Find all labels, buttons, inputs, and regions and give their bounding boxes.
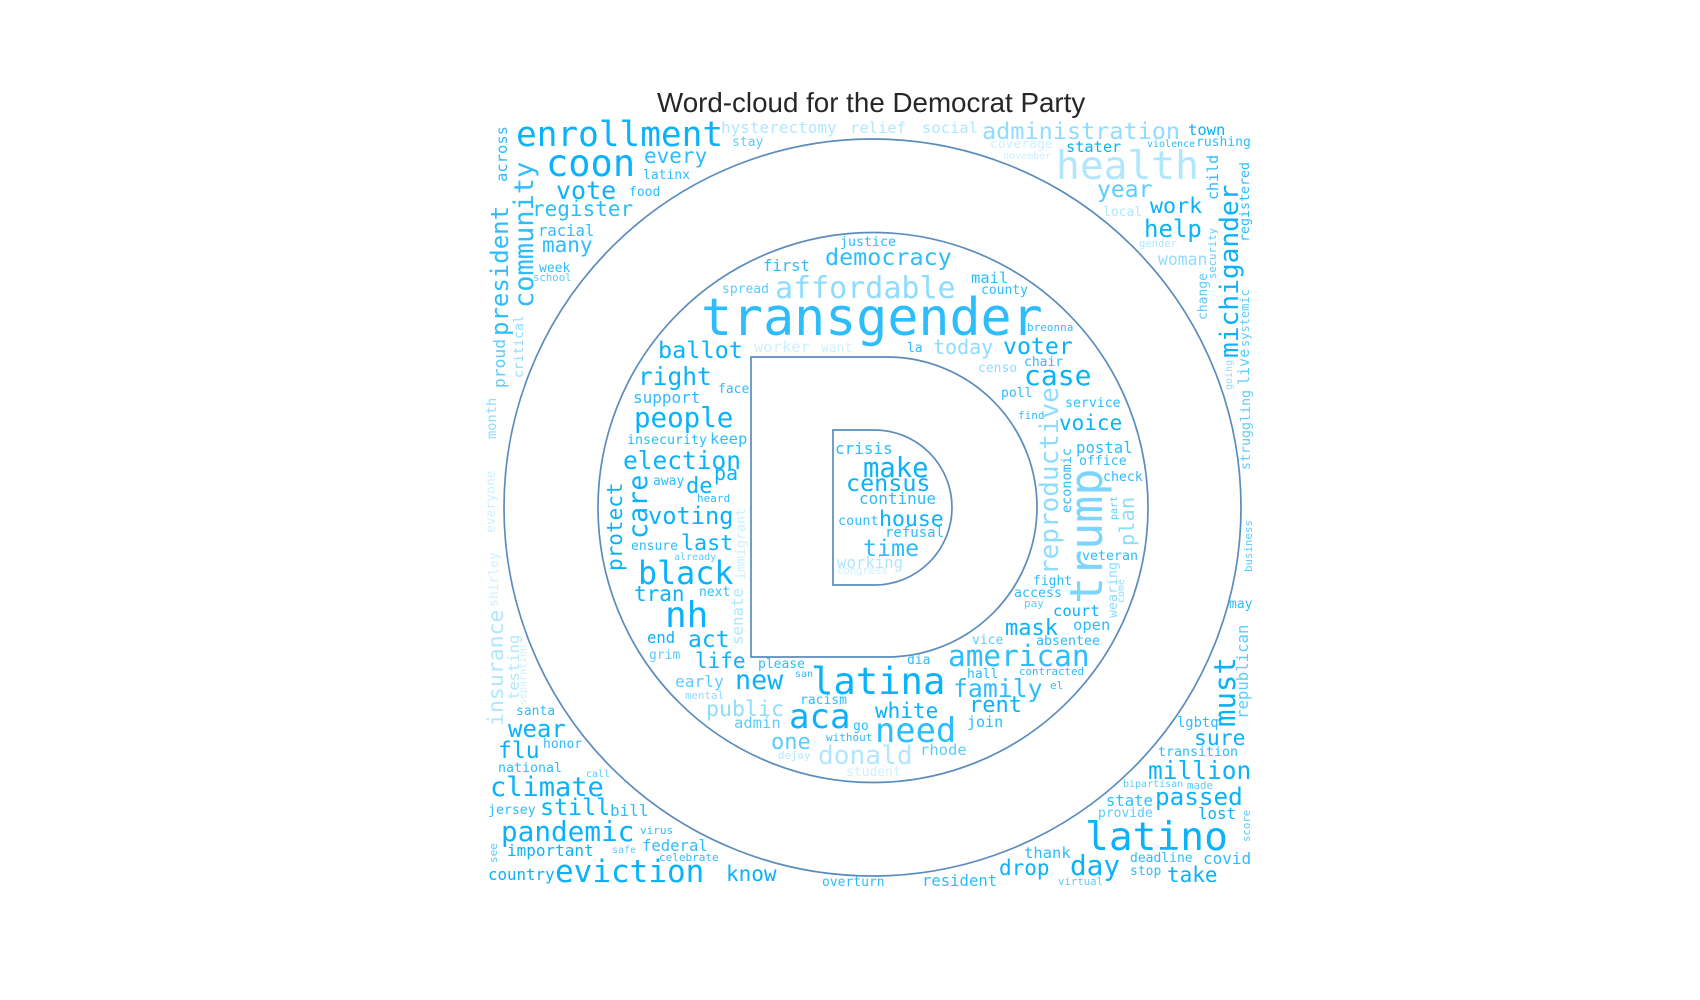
words: inner ring bottom: family (953, 674, 1043, 703)
words: top-right corner: security (1207, 228, 1219, 279)
words: bottom-left corner: bill (610, 801, 649, 820)
words: inner ring right: pay (1024, 597, 1044, 610)
words: center of the logo: crisis (835, 439, 893, 458)
words: bottom-left corner: safe (612, 845, 636, 856)
words: center of the logo: continue (859, 489, 936, 508)
words: left edge: everyone (484, 470, 499, 533)
words: bottom-left corner: santa (516, 704, 555, 719)
words: top-right corner: help (1144, 215, 1202, 243)
words: bottom-left corner: honor (543, 737, 582, 752)
words: bottom-left corner: celebrate (659, 851, 719, 864)
words: top-left corner: register (532, 197, 633, 221)
words: top-left corner: racial (538, 222, 594, 240)
words: inner ring top: breonna (1027, 321, 1073, 334)
words: left edge: insurance (484, 610, 509, 726)
words: top-left corner: latinx (643, 168, 690, 183)
words: center of the logo: census (846, 469, 930, 497)
words: inner ring bottom: rent (969, 693, 1022, 718)
words: inner ring top: chair (1024, 355, 1063, 370)
words: inner ring left: care (623, 475, 654, 539)
words: bottom-left corner (487, 704, 885, 890)
words: bottom-left corner: know (726, 862, 777, 886)
words: inner ring left: immigrant (734, 508, 749, 580)
words: bottom-right corner: deadline (1130, 851, 1193, 866)
words: top-left corner: president (486, 206, 514, 336)
words: top-right corner: going (1224, 360, 1235, 390)
words: bottom-right corner: provide (1098, 806, 1153, 821)
words: inner ring left: pa (714, 461, 738, 485)
words: inner ring top: voter (1003, 333, 1073, 360)
words: inner ring top: justice (840, 235, 896, 250)
words: bottom-right corner: transition (1158, 745, 1238, 760)
words: inner ring bottom: go (853, 719, 869, 734)
words: inner ring right: find (1018, 409, 1044, 422)
words: inner ring top: county (981, 283, 1028, 298)
words: bottom-left corner: pandemic (501, 815, 634, 848)
words: top-right corner: struggling (1239, 390, 1254, 470)
words: inner ring left: senate (728, 588, 747, 645)
words: center of the logo: count (838, 513, 879, 529)
words: bottom-right corner: thank (1024, 844, 1071, 862)
words: inner ring left: protect (603, 482, 627, 571)
words: inner ring bottom: without (826, 731, 872, 744)
words: inner ring bottom: donald (818, 741, 913, 771)
words: bottom-right corner: latino (1085, 814, 1228, 860)
words: inner ring right: mask (1005, 616, 1058, 641)
words: bottom-left corner: wear (508, 715, 566, 743)
words: inner ring top: want (821, 341, 852, 356)
words: inner ring bottom: dejoy (778, 749, 811, 762)
words: inner ring left: grim (649, 648, 680, 663)
words: center of the logo: congress (837, 565, 888, 577)
words: inner ring right: court (1053, 602, 1100, 620)
words: center of the logo: working (837, 553, 903, 572)
words: inner ring bottom: hall (967, 667, 998, 682)
words: inner ring left: people (634, 402, 733, 434)
words: top-left corner: coon (546, 142, 635, 185)
words: center of the logo: time (863, 535, 919, 562)
words: bottom-right corner: state (1106, 792, 1153, 810)
words: bottom-right corner: day (1070, 849, 1120, 882)
words: bottom-right corner: lgbtq (1177, 715, 1219, 731)
words: top-left corner: school (533, 271, 572, 284)
words: inner ring bottom: latina (811, 659, 945, 703)
icon: Democrat party logo outline (504, 139, 1241, 876)
words: inner ring left: black (638, 556, 733, 592)
words: inner ring right: absentee (1036, 634, 1100, 649)
words: inner ring top: ballot (658, 336, 743, 364)
words: bottom-right corner: virtual (1058, 875, 1103, 888)
words: inner ring left: de (686, 474, 712, 499)
words: inner ring right: veteran (1082, 549, 1138, 564)
words: center of the logo: make (863, 453, 928, 484)
words: inner ring right: fight (1033, 574, 1072, 589)
words: top-right corner: violence (1147, 139, 1195, 150)
words: inner ring right: vice (972, 633, 1003, 648)
words: inner ring right: plan (1115, 497, 1139, 546)
words: inner ring left: tran (634, 582, 685, 606)
words: inner ring top: case (1024, 359, 1091, 392)
words: top-right corner: administration (982, 117, 1180, 145)
words: inner ring top (658, 235, 1091, 392)
words: bottom-left corner: climate (490, 772, 604, 803)
words: left edge (484, 398, 529, 726)
words: top-right corner: stater (1066, 138, 1121, 156)
words: bottom-right corner: sure (1194, 726, 1246, 751)
words: inner ring bottom: public (706, 697, 784, 722)
words: top-right corner: november (1003, 151, 1051, 162)
words: inner ring bottom: día (907, 653, 930, 668)
words: inner ring left (603, 362, 749, 673)
words: top-right corner: rushing (1196, 135, 1251, 150)
words: top-right corner: health (1056, 143, 1199, 189)
words: left edge: month (484, 398, 500, 439)
words: center of the logo: refusal (885, 525, 944, 541)
words: bottom-right corner: take (1167, 863, 1218, 887)
words: inner ring top: transgender (701, 288, 1043, 348)
words: top-left corner: across (493, 126, 511, 182)
words: inner ring bottom: student (846, 765, 901, 780)
words: inner ring top: first (763, 257, 810, 275)
words: right edge: must (1208, 657, 1242, 727)
words: bottom-left corner: overturn (822, 875, 885, 890)
words: bottom-left corner: call (586, 769, 610, 780)
words: inner ring bottom: join (967, 713, 1003, 731)
words: top-right corner: registered (1238, 162, 1253, 242)
words: center of the logo: house (879, 507, 944, 532)
words: top-right corner: coverage (990, 137, 1053, 152)
words: top-left corner: hysterectomy (721, 118, 837, 137)
words: inner ring top: spread (722, 282, 769, 297)
words: inner ring right: poll (1001, 386, 1032, 401)
words: bottom-left corner: still (540, 794, 610, 821)
words: inner ring right: reproductive (1035, 387, 1065, 575)
words: inner ring bottom: admin (734, 714, 781, 732)
words: inner ring bottom: need (875, 711, 956, 750)
words: top-left corner: food (629, 185, 660, 200)
words: right edge: score (1240, 810, 1253, 842)
words: inner ring left: voting (648, 502, 734, 530)
words: inner ring bottom: el (1050, 679, 1063, 692)
words: right edge: republican (1233, 625, 1252, 719)
words: top-right corner (850, 117, 1254, 470)
words: bottom-right corner: million (1148, 756, 1251, 785)
words: bottom-left corner: national (498, 761, 562, 776)
words: bottom-left corner: eviction (555, 854, 704, 890)
title: Word-cloud for the Democrat Party (657, 87, 1085, 118)
words: inner ring right (972, 386, 1143, 649)
words: bottom-right corner: resident (922, 872, 997, 890)
words: bottom-right corner: stop (1130, 864, 1161, 879)
words: inner ring left: insecurity (627, 433, 707, 448)
words: inner ring right: access (1014, 586, 1062, 601)
words: bottom-right corner: made (1187, 779, 1213, 792)
words: inner ring right: come (1116, 579, 1127, 603)
words: inner ring right: trump (1060, 469, 1113, 604)
words: top-left corner: many (542, 233, 593, 257)
words: bottom-right corner: drop (999, 856, 1050, 880)
words: top-right corner: social (922, 119, 978, 137)
words: top-right corner: woman (1158, 250, 1207, 269)
words: inner ring left: support (633, 388, 700, 407)
words: left edge: separation (518, 645, 529, 705)
words: inner ring top: today (933, 335, 993, 359)
words: inner ring left: face (718, 382, 749, 397)
words: inner ring bottom: aca (789, 697, 850, 737)
words: inner ring left: heard (697, 492, 730, 505)
words: inner ring right: service (1065, 396, 1121, 411)
words: left edge: testing (505, 635, 523, 700)
words: inner ring left: ensure (631, 539, 678, 554)
words: inner ring bottom: please (758, 657, 805, 672)
words: inner ring bottom: american (948, 639, 1090, 673)
words: right edge (1208, 520, 1255, 842)
words: inner ring right: open (1073, 616, 1110, 634)
words: top-right corner: michigander (1215, 185, 1245, 358)
words: top-right corner: work (1150, 194, 1202, 219)
words: bottom-left corner: jersey (488, 803, 536, 818)
words: bottom-left corner: flu (498, 738, 540, 764)
words: bottom-left corner: important (507, 841, 594, 860)
words: inner ring right: voice (1059, 411, 1122, 435)
words: top-left corner: stay (732, 135, 763, 150)
words: inner ring top: democracy (825, 243, 952, 271)
words: center of the logo (835, 439, 944, 577)
words: right edge: business (1242, 520, 1255, 572)
words: inner ring left: away (653, 474, 684, 489)
words: top-right corner: year (1097, 177, 1152, 203)
words: bottom-right corner: lost (1198, 804, 1236, 823)
words: inner ring top: affordable (775, 271, 956, 306)
words: top-right corner: child (1204, 155, 1222, 200)
words: bottom-right corner: covid (1203, 849, 1251, 868)
words: inner ring bottom: racism (800, 693, 847, 708)
words: bottom-left corner: country (488, 865, 555, 884)
words: inner ring top: mail (971, 269, 1008, 287)
words: inner ring bottom: san (795, 669, 813, 680)
words: inner ring left: already (674, 552, 716, 563)
words: bottom-right corner (922, 715, 1251, 890)
words: inner ring top: censo (978, 361, 1017, 376)
words: top-left corner: community (509, 162, 540, 308)
words: inner ring right: check (1103, 470, 1143, 485)
words: top-left corner: every (644, 144, 707, 168)
words: top-right corner: relief (850, 119, 906, 137)
words: inner ring bottom: contracted (1019, 665, 1084, 678)
words: inner ring bottom: one (771, 730, 811, 755)
words: top-left corner: proud (490, 339, 509, 388)
words: inner ring top: worker (754, 338, 810, 356)
words: inner ring left: keep (710, 430, 747, 448)
words: inner ring bottom: new (735, 665, 784, 696)
words: top-left corner: critical (512, 315, 527, 378)
words: top-left corner: enrollment (516, 115, 723, 155)
words: top-right corner: change (1196, 273, 1211, 320)
words: inner ring right: postal (1076, 438, 1133, 457)
words: inner ring left: election (623, 446, 741, 475)
words: inner ring left: life (695, 649, 746, 673)
words: inner ring left: right (638, 362, 712, 391)
words: inner ring left: act (688, 627, 730, 653)
words: bottom-right corner: bipartisan (1123, 779, 1183, 790)
words: inner ring right: office (1079, 454, 1127, 469)
words: top-left corner: vote (556, 176, 616, 205)
words: top-right corner: live (1235, 349, 1253, 385)
words: top-left corner (486, 115, 837, 388)
words: inner ring right: economic (1059, 448, 1075, 513)
words: inner ring left: end (647, 629, 675, 647)
words: inner ring left: nh (665, 595, 708, 636)
words: bottom-left corner: see (487, 843, 500, 863)
words: inner ring left: last (681, 531, 733, 556)
words: bottom-left corner: federal (642, 837, 708, 855)
words: left edge: shirley (487, 552, 502, 607)
words: inner ring bottom: mental (685, 689, 724, 702)
words: inner ring right: part (1109, 496, 1120, 520)
words: top-right corner: town (1188, 121, 1225, 139)
words: top-right corner: local (1103, 205, 1142, 220)
words: right edge: may (1229, 597, 1253, 612)
words: bottom-left corner: virus (640, 824, 673, 837)
words: inner ring left: next (699, 585, 730, 600)
words: top-right corner: systemic (1238, 289, 1252, 347)
words: top-left corner: week (539, 261, 570, 276)
words: inner ring bottom (675, 639, 1090, 780)
words: inner ring top: la (907, 341, 923, 356)
words: inner ring bottom: rhode (920, 741, 967, 759)
words: inner ring right: wearing (1106, 562, 1121, 618)
words: bottom-right corner: passed (1155, 782, 1243, 811)
words: top-right corner: gender (1139, 238, 1177, 250)
words: inner ring bottom: early (675, 672, 724, 691)
words: inner ring bottom: white (875, 699, 938, 723)
